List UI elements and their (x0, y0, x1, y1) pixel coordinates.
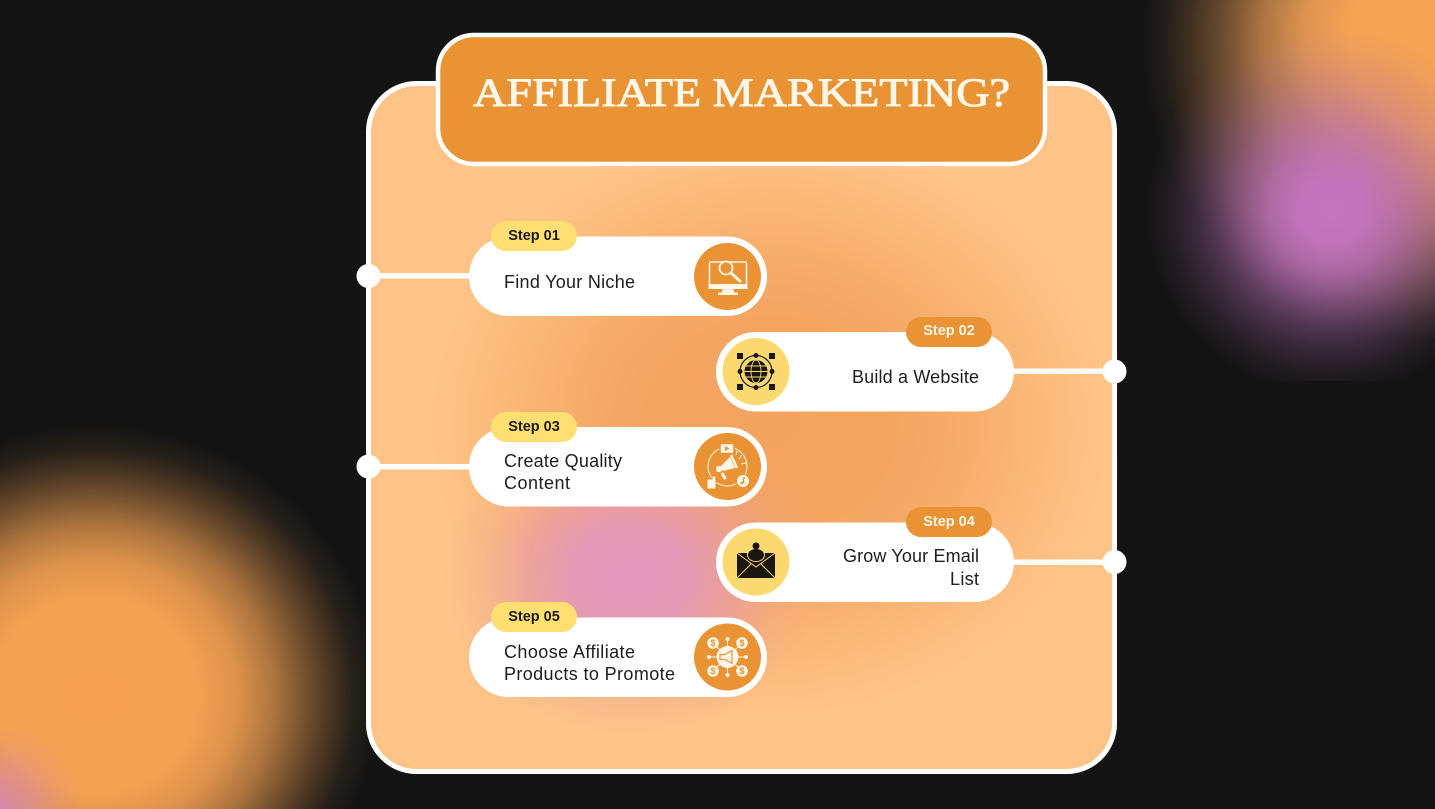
icon: monitor with magnifier (694, 243, 761, 310)
pill: step 2 (716, 332, 1014, 412)
badge: step 2: Step 02 (923, 323, 975, 339)
pill: step 3 (469, 427, 767, 506)
connector: step 2 (1012, 360, 1126, 384)
title banner (438, 35, 1045, 164)
badge: step 1 (491, 221, 577, 251)
icon: megaphone with dollars (694, 624, 761, 690)
icon: email subscriber (722, 528, 790, 596)
text: step 5: Choose Affiliate (504, 642, 635, 662)
text: step 4: List (950, 569, 979, 589)
step 4 (716, 507, 1126, 602)
text: step 3: Create Quality (504, 451, 622, 471)
step 2 (716, 317, 1126, 412)
connector: step 4 (1012, 550, 1126, 574)
text: step 1: Find Your Niche (504, 272, 635, 292)
connector: step 1 (356, 264, 472, 288)
icon: megaphone with media (694, 433, 761, 500)
badge: step 3 (491, 412, 577, 442)
badge: step 5 (491, 602, 577, 632)
badge: step 4: Step 04 (923, 514, 975, 530)
text: step 2: Build a Website (852, 367, 979, 387)
badge: step 2 (906, 317, 992, 347)
panel: main card (368, 84, 1114, 772)
text: step 5: Products to Promote (504, 664, 675, 684)
icon: megaphone with dollars: $ (739, 666, 745, 676)
badge: step 1: Step 01 (508, 228, 560, 244)
pill: step 1 (469, 236, 767, 316)
icon: megaphone with dollars: $ (739, 638, 745, 648)
pill: step 4 (716, 522, 1014, 602)
text: step 4: Grow Your Email (843, 546, 979, 566)
decorative blob: top right orange and purple glow (1143, 0, 1435, 381)
step 1 (356, 221, 767, 316)
text: step 3: Content (504, 473, 570, 493)
connector: step 3 (356, 454, 472, 478)
badge: step 5: Step 05 (508, 609, 560, 625)
icon: globe network (722, 338, 790, 405)
title: AFFILIATE MARKETING? (473, 70, 1010, 115)
badge: step 3: Step 03 (508, 419, 560, 435)
badge: step 4 (906, 507, 992, 537)
step 5 (469, 602, 767, 697)
step 3 (356, 412, 767, 506)
icon: megaphone with dollars: $ (710, 666, 716, 676)
icon: megaphone with dollars: $ (710, 638, 716, 648)
decorative blob: bottom left orange glow (0, 435, 366, 809)
pill: step 5 (469, 618, 767, 697)
